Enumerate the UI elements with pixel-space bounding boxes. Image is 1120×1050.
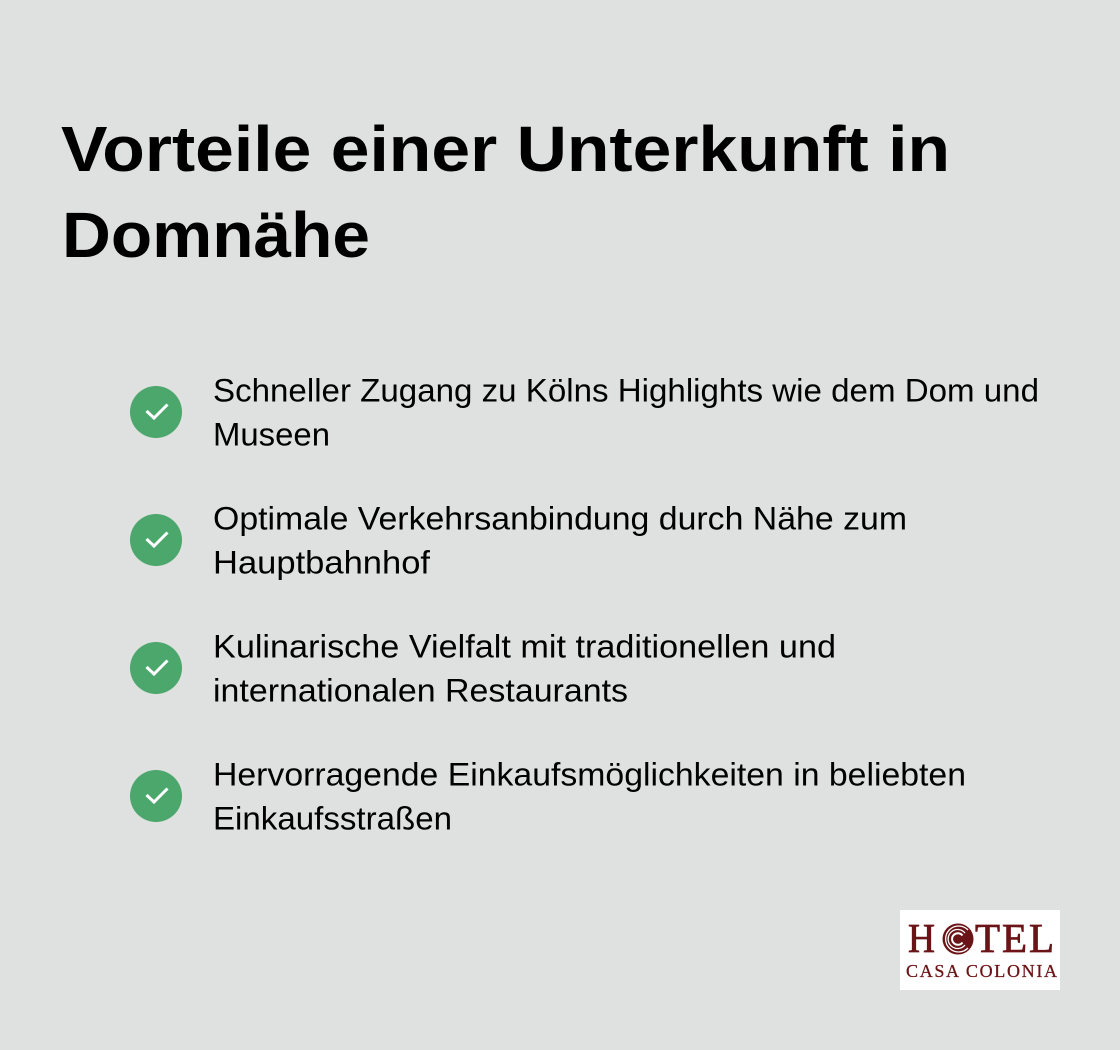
logo: Hotel Casa Colonia: H — [908, 915, 935, 961]
title: Domnähe — [62, 199, 370, 271]
text: benefit 2: Hauptbahnhof — [213, 544, 430, 580]
list of benefits — [130, 372, 1039, 836]
text: benefit 1 — [213, 372, 1039, 452]
benefit 3 — [130, 628, 836, 708]
text: benefit 2 — [213, 500, 907, 580]
benefit 2 — [130, 500, 907, 580]
benefit 1 — [130, 372, 1039, 452]
text: benefit 4 — [213, 756, 966, 836]
text: benefit 2: Optimale Verkehrsanbindung durch Nähe zum — [213, 500, 907, 536]
text: benefit 1: Schneller Zugang zu Kölns Highlights wie dem Dom und — [213, 372, 1039, 408]
icon: logo spiral circle — [942, 924, 974, 954]
logo: Hotel Casa Colonia: CASA COLONIA — [906, 961, 1057, 981]
text: benefit 3: Kulinarische Vielfalt mit traditionellen und — [213, 628, 836, 664]
text: benefit 4: Einkaufsstraßen — [213, 800, 452, 836]
logo: Hotel Casa Colonia: TEL — [975, 915, 1054, 961]
text: benefit 3 — [213, 628, 836, 708]
benefit 4 — [130, 756, 966, 836]
icon: check 3 — [130, 642, 182, 694]
icon: check 4 — [130, 770, 182, 822]
text: benefit 1: Museen — [213, 416, 330, 452]
text: benefit 3: internationalen Restaurants — [213, 672, 628, 708]
logo: Hotel Casa Colonia — [900, 910, 1060, 990]
text: benefit 4: Hervorragende Einkaufsmöglichkeiten in beliebten — [213, 756, 966, 792]
title — [61, 113, 950, 271]
title: Vorteile einer Unterkunft in — [61, 113, 950, 185]
icon: check 1 — [130, 386, 182, 438]
icon: check 2 — [130, 514, 182, 566]
